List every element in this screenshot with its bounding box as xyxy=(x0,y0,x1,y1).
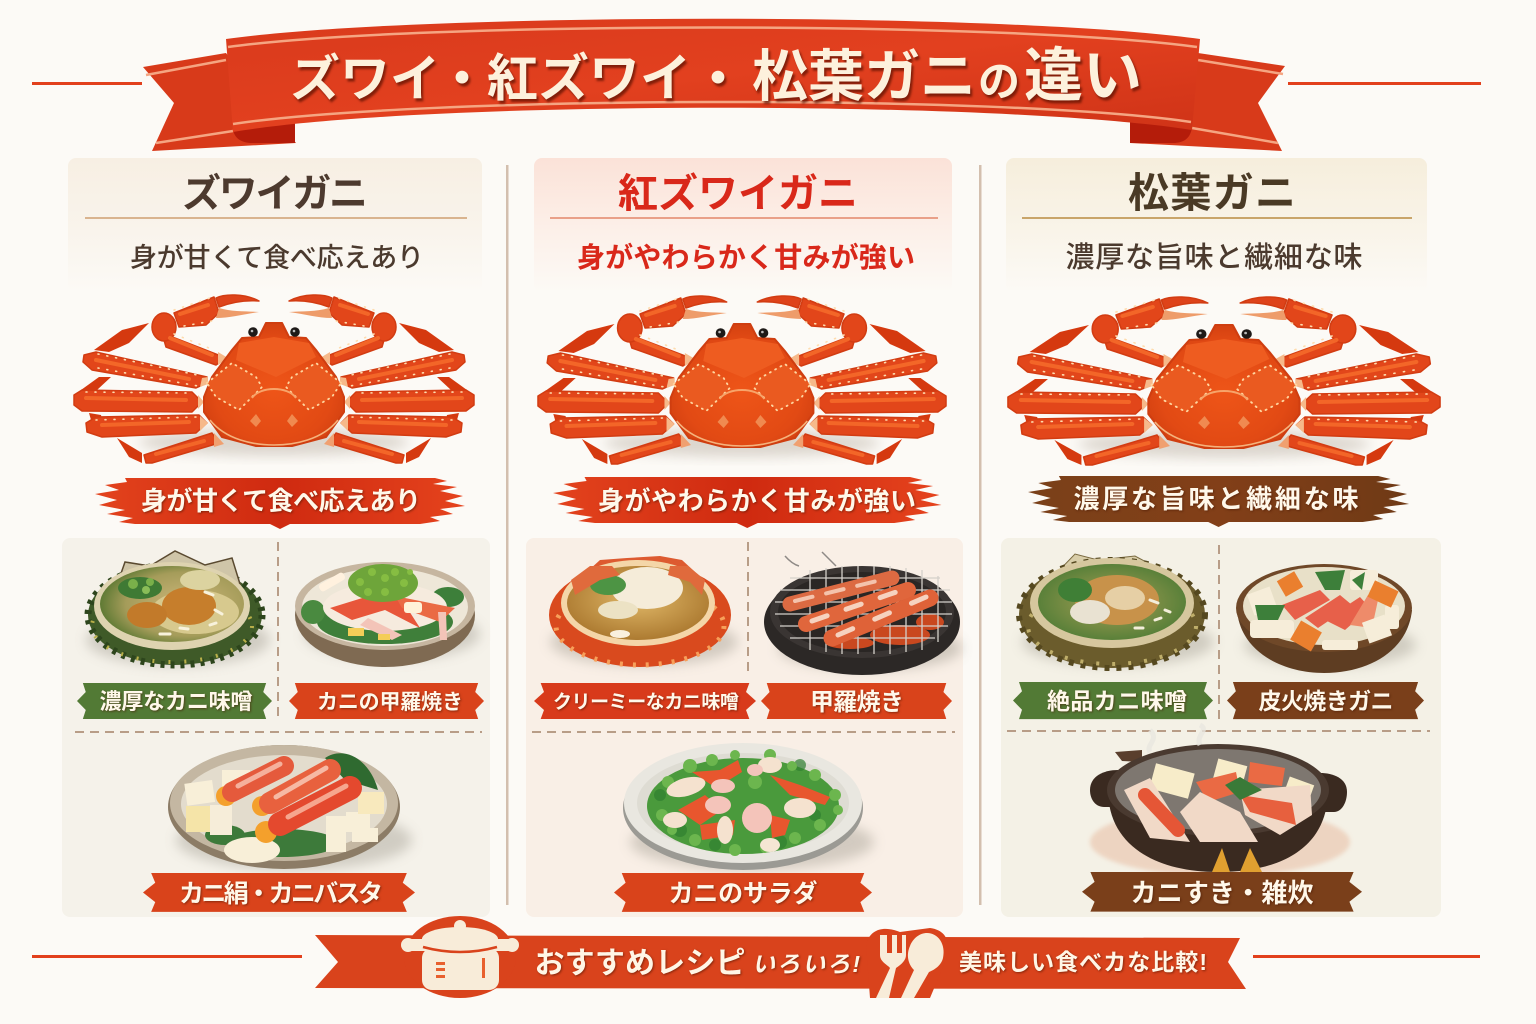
ribbon stripes xyxy=(228,28,1197,124)
dashed horizontal xyxy=(75,731,482,733)
subtitle: 身がやわらかく甘みが強い xyxy=(577,241,915,273)
decorative side line: footer right xyxy=(1253,955,1480,958)
column divider right xyxy=(979,165,982,905)
column divider left xyxy=(506,165,508,905)
panel: ズワイガニ xyxy=(62,158,490,917)
taste banner xyxy=(553,477,942,528)
dashed vertical xyxy=(277,542,279,720)
label: shell grill: 甲羅焼き xyxy=(810,689,904,716)
label: crab dish: カニ絹・カニバスタ xyxy=(179,880,383,908)
dish: stew bowl xyxy=(1236,564,1416,673)
dashed horizontal xyxy=(532,731,955,733)
label: shell grill xyxy=(761,683,952,719)
footer text: compare: 美味しい食べカな比較! xyxy=(959,949,1207,975)
title text: 紅ズワイ xyxy=(487,50,691,107)
taste banner xyxy=(1028,476,1409,527)
dish: crab salad xyxy=(623,743,874,870)
label: rich crab miso: 濃厚なカニ味噌 xyxy=(100,689,252,714)
decorative side line: title right xyxy=(1288,82,1481,85)
dish: crab hot pot xyxy=(1090,725,1350,876)
subtitle: 濃厚な旨味と繊細な味 xyxy=(1066,241,1362,274)
heading underline xyxy=(1022,217,1412,219)
ribbon left tail xyxy=(143,53,296,151)
title text: 松葉ガニ xyxy=(752,45,976,108)
label: crab sukiyaki and porridge: カニすき・雑炊 xyxy=(1130,878,1314,908)
label: crab sukiyaki and porridge xyxy=(1082,872,1362,912)
ribbon band xyxy=(315,935,1246,989)
header background xyxy=(1006,158,1427,293)
ribbon folds xyxy=(233,120,1192,143)
dish: crab salad bowl xyxy=(295,562,480,667)
dish: green crab shell miso xyxy=(86,551,270,666)
header background xyxy=(534,158,952,293)
heading underline xyxy=(85,217,467,219)
subtitle: 身が甘くて食べ応えあり xyxy=(130,243,424,273)
taste banner: 身がやわらかく甘みが強い xyxy=(598,486,916,516)
title ribbon xyxy=(143,19,1285,151)
label: charcoal grilled crab: 皮火焼きガニ xyxy=(1258,688,1394,714)
heading: ズワイガニ xyxy=(182,173,368,216)
dish: crab leg plate xyxy=(168,745,412,870)
title text: の xyxy=(978,58,1020,105)
footer text: recommended recipes: おすすめレシピ xyxy=(534,947,746,980)
title text: ・ xyxy=(693,51,743,107)
label: creamy crab miso: クリーミーなカニ味噌 xyxy=(553,691,739,713)
label: charcoal grilled crab xyxy=(1227,682,1424,719)
title text: ・ xyxy=(437,51,487,107)
footer ribbon xyxy=(315,916,1246,998)
label: premium crab miso: 絶品カニ味噌 xyxy=(1047,688,1187,714)
dish: red crab shell miso xyxy=(549,556,738,667)
label: crab dish xyxy=(143,873,415,912)
dashed horizontal xyxy=(1007,730,1430,732)
crab illustration xyxy=(538,296,946,464)
label: premium crab miso xyxy=(1013,682,1213,719)
label: shell grill: カニの甲羅焼き xyxy=(317,691,463,714)
dishes panel xyxy=(526,538,963,917)
decorative side line: footer left xyxy=(32,955,302,958)
pot icon xyxy=(401,916,519,998)
label: creamy crab miso xyxy=(534,683,756,719)
taste banner xyxy=(95,478,465,529)
dish: premium crab miso shell xyxy=(1019,554,1214,668)
dashed vertical xyxy=(1218,545,1220,720)
header background xyxy=(68,158,482,293)
heading: 紅ズワイガニ xyxy=(618,172,858,216)
ribbon main band xyxy=(226,19,1200,132)
title text: ズワイ xyxy=(290,51,440,107)
crab illustration xyxy=(1008,297,1440,465)
utensils icon xyxy=(866,928,948,998)
heading: 松葉ガニ xyxy=(1128,170,1296,216)
footer text: various: いろいろ! xyxy=(752,951,860,977)
ribbon tail stripes xyxy=(146,60,1283,143)
dishes panel xyxy=(1001,538,1441,917)
taste banner: 身が甘くて食べ応えあり xyxy=(141,486,421,516)
label: rich crab miso xyxy=(77,683,272,719)
label: crab salad: カニのサラダ xyxy=(668,879,818,908)
heading underline xyxy=(550,217,938,219)
decorative side line: title left xyxy=(32,82,142,85)
dashed vertical xyxy=(747,542,749,675)
ribbon right tail xyxy=(1130,53,1285,151)
panel: 松葉ガニ xyxy=(1001,158,1441,917)
taste banner: 濃厚な旨味と繊細な味 xyxy=(1074,484,1358,514)
dish: grilled crab legs xyxy=(764,552,962,675)
label: shell grill xyxy=(289,683,484,719)
dishes panel xyxy=(62,538,490,917)
label: crab salad xyxy=(614,873,872,912)
title text: 違い xyxy=(1024,43,1142,109)
panel: 紅ズワイガニ xyxy=(526,158,963,917)
crab illustration xyxy=(74,295,474,463)
